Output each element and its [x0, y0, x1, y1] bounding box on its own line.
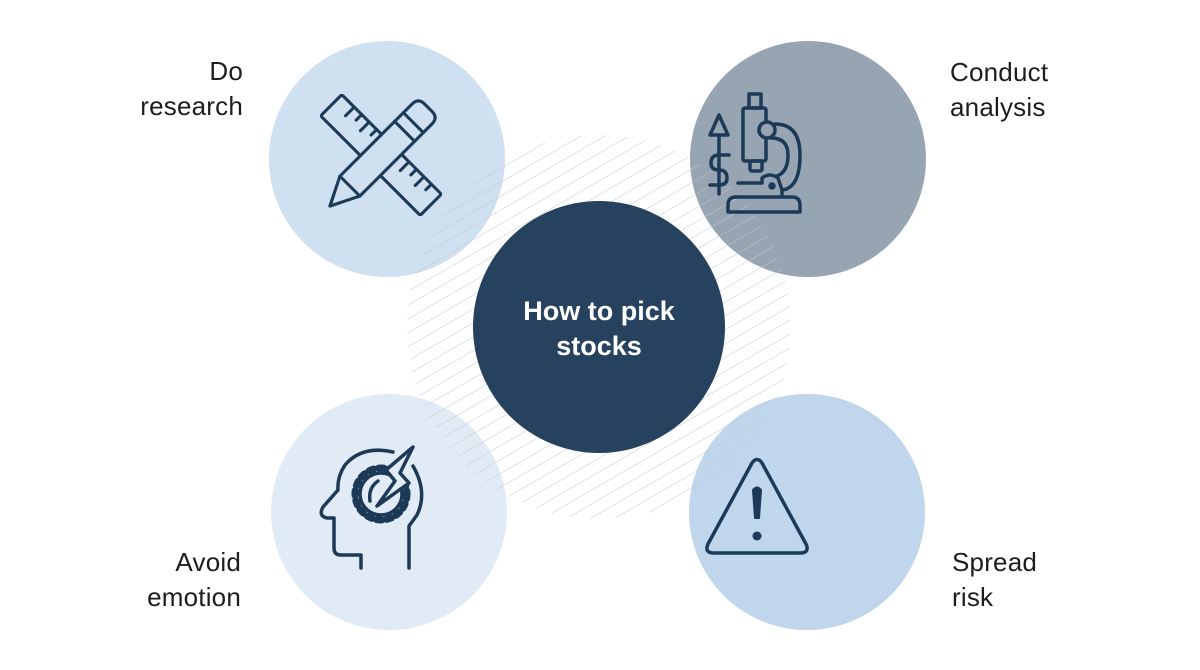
icon: warning triangle [707, 460, 807, 553]
circle: conduct analysis [690, 41, 926, 277]
label: avoid emotion: Avoid [175, 547, 241, 577]
circle: avoid emotion [271, 394, 507, 630]
label: do research: research [140, 91, 243, 121]
center circle: stocks [556, 331, 642, 361]
center circle [473, 201, 725, 453]
label: conduct analysis [950, 57, 1048, 122]
label: avoid emotion [147, 547, 241, 612]
label: do research [140, 56, 243, 121]
icon: ruler and pencil [320, 95, 441, 216]
center circle: How to pick [523, 296, 676, 326]
label: do research: Do [209, 56, 243, 86]
circle: spread risk [689, 394, 925, 630]
label: spread risk: Spread [952, 547, 1037, 577]
icon: head with gear and lightning [321, 447, 422, 568]
label: conduct analysis: Conduct [950, 57, 1048, 87]
label: spread risk [952, 547, 1037, 612]
label: conduct analysis: analysis [950, 92, 1046, 122]
circle: do research [269, 41, 505, 277]
label: avoid emotion: emotion [147, 582, 241, 612]
icon: microscope [710, 94, 800, 212]
label: spread risk: risk [952, 582, 993, 612]
